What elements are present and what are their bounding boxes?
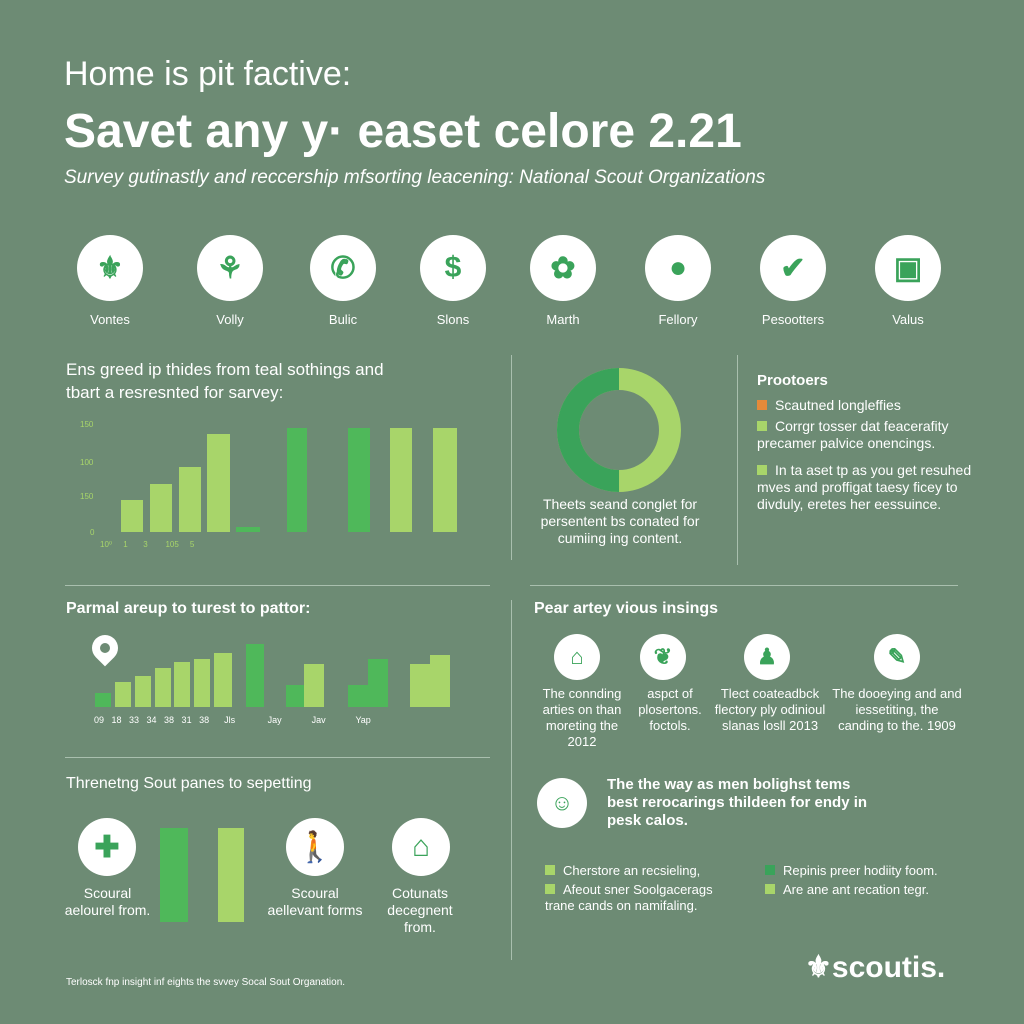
bottom right callout: pesk calos. — [607, 812, 688, 829]
section heading: parmal: Parmal areup to turest to pattor: — [66, 600, 310, 617]
insight icons — [542, 634, 962, 749]
insight icons: ❦ — [654, 644, 672, 669]
donut caption: Theets seand conglet for persentent bs conated for cumiing ing content. — [541, 496, 699, 546]
insight icons: Tlect coateadbck flectory ply odinioul slanas losll 2013 — [715, 686, 825, 733]
icon row: Valus — [892, 312, 924, 327]
section heading: threnetng: Threnetng Sout panes to sepetting — [66, 775, 312, 792]
icon row: Pesootters — [762, 312, 824, 327]
icon row: ● — [669, 251, 687, 284]
icon row: Vontes — [90, 312, 130, 327]
icon row: Fellory — [658, 312, 698, 327]
bar chart 1: 150 — [80, 420, 93, 429]
bar chart 1: 0 — [90, 528, 94, 537]
bottom right callout — [537, 776, 867, 829]
bottom right legend — [545, 863, 938, 913]
subtitle: Survey gutinastly and reccership mfsorting leacening: National Scout Organizations — [64, 167, 765, 188]
insight icons: ♟ — [757, 644, 777, 669]
bottom right callout: ☺ — [551, 790, 573, 815]
bar chart 1: 100 — [80, 458, 93, 467]
icon row: ✿ — [550, 252, 576, 284]
donut chart — [557, 368, 681, 492]
icon row: Volly — [216, 312, 244, 327]
main heading: Savet any y· easet celore 2.21 — [64, 105, 742, 158]
legend panel — [757, 372, 971, 512]
icon row: $ — [445, 251, 461, 284]
bottom right legend: Repinis preer hodiity foom. — [783, 863, 938, 878]
section heading: insights: Pear artey vious insings — [534, 600, 718, 617]
bottom left icons and bars: Cotunats decegnent from. — [387, 885, 453, 935]
icon row: ⚘ — [217, 252, 243, 284]
insight icons: aspct of plosertons. foctols. — [638, 686, 702, 733]
bottom left icons and bars: 🚶 — [296, 830, 334, 864]
bottom left icons and bars: Scoural aelourel from. — [65, 885, 150, 918]
insight icons: ⌂ — [570, 644, 584, 669]
left heading — [66, 360, 384, 402]
left heading: tbart a resresnted for sarvey: — [66, 383, 283, 402]
insight icons: The dooeying and and iessetiting, the canding to the. 1909 — [832, 686, 962, 733]
icon row: ▣ — [894, 252, 922, 284]
legend panel: Prootoers — [757, 372, 828, 389]
bar chart 1: 150 — [80, 492, 93, 501]
bar chart 2 — [92, 635, 450, 725]
bottom right legend: Cherstore an recsieling, — [563, 863, 700, 878]
icon row: ⚜ — [97, 252, 123, 284]
bottom right callout: best rerocarings thildeen for endy in — [607, 794, 867, 811]
bottom right legend: Are ane ant recation tegr. — [783, 882, 929, 897]
bottom right legend: Afeout sner Soolgacerags trane cands on namifaling. — [545, 882, 713, 913]
left heading: Ens greed ip thides from teal sothings and — [66, 360, 384, 379]
bar chart 1: 10⁰ 1 3 105 5 — [100, 540, 194, 549]
insight icons: The connding arties on than moreting the 2012 — [543, 686, 621, 749]
title: Home is pit factive: — [64, 55, 351, 93]
icon row: ✔ — [780, 252, 806, 284]
bottom left icons and bars: Scoural aellevant forms — [268, 885, 362, 918]
bottom left icons and bars: ⌂ — [412, 830, 430, 863]
bottom left icons and bars — [65, 818, 453, 935]
legend panel: In ta aset tp as you get resuhed mves and proffigat taesy ficey to divduly, eretes her eessuince. — [757, 462, 971, 512]
bar chart 1 — [80, 420, 457, 549]
icon row — [77, 235, 941, 327]
icon row: Slons — [437, 312, 469, 327]
legend panel: Scautned longleffies — [775, 397, 901, 413]
icon row: ✆ — [330, 252, 356, 284]
logo: ⚜scoutis. — [805, 951, 945, 984]
insight icons: ✎ — [888, 644, 906, 669]
bottom right callout: The the way as men bolighst tems — [607, 776, 850, 793]
footer: Terlosck fnp insight inf eights the svvey Socal Sout Organation. — [66, 977, 345, 988]
legend panel: Corrgr tosser dat feacerafity precamer palvice onencings. — [757, 418, 949, 451]
icon row: Bulic — [329, 312, 357, 327]
bar chart 2: 09 18 33 34 38 31 38 Jls Jay Jav Yap — [94, 715, 371, 725]
bottom left icons and bars: ✚ — [94, 830, 120, 864]
icon row: Marth — [546, 312, 580, 327]
